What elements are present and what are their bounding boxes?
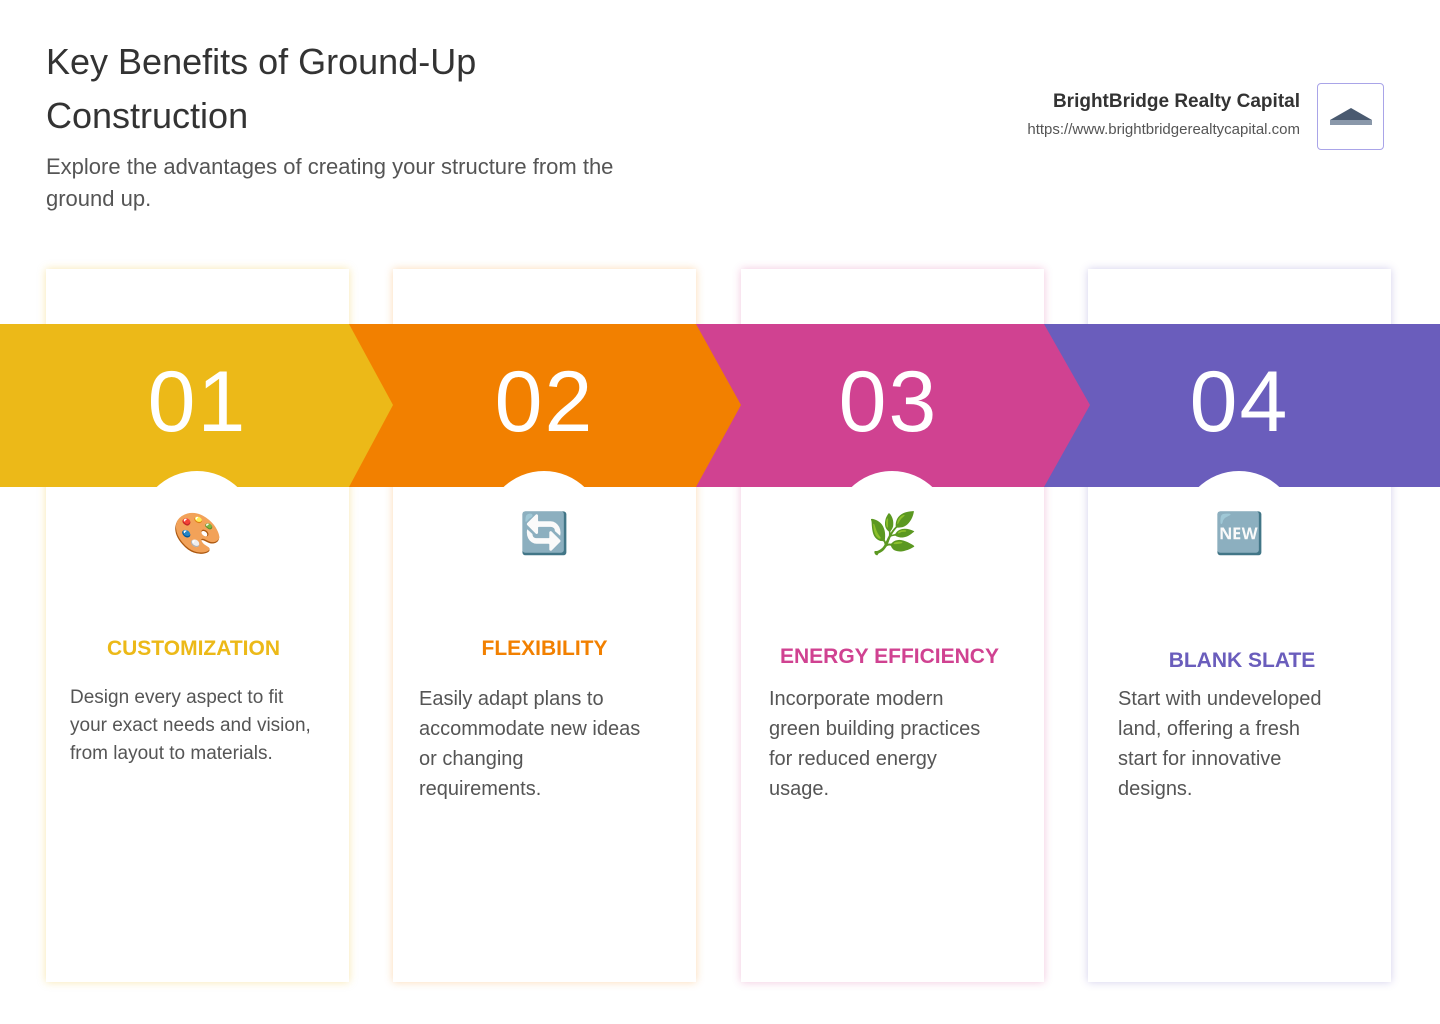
text 3: Incorporate modern [769, 688, 944, 710]
title: Construction [46, 95, 248, 136]
card 4 [1088, 269, 1391, 982]
card 3 [741, 269, 1044, 982]
number 03: 03 [839, 354, 938, 450]
heading 3: ENERGY EFFICIENCY [780, 645, 999, 668]
title [46, 41, 476, 136]
text 1: Design every aspect to fit [70, 687, 283, 708]
subtitle: Explore the advantages of creating your structure from the ground up. [46, 154, 613, 211]
text 2: accommodate new ideas [419, 718, 640, 740]
text 1: your exact needs and vision, [70, 715, 311, 736]
text 4: Start with undeveloped [1118, 688, 1321, 710]
heading 2: FLEXIBILITY [482, 637, 608, 660]
brand name: BrightBridge Realty Capital [1053, 91, 1300, 112]
chevron band [0, 324, 1440, 487]
icon: herb: 🌿 [868, 511, 917, 557]
icon: refresh: 🔄 [520, 511, 569, 557]
text 2: Easily adapt plans to [419, 688, 604, 710]
brand url: https://www.brightbridgerealtycapital.com [1027, 121, 1300, 138]
text 1: from layout to materials. [70, 743, 273, 764]
title: Key Benefits of Ground-Up [46, 41, 476, 82]
logo [1317, 83, 1384, 150]
icon: palette: 🎨 [173, 511, 222, 557]
number 02: 02 [495, 354, 594, 450]
text 2: or changing [419, 748, 524, 770]
text 3: green building practices [769, 718, 980, 740]
number 01: 01 [148, 354, 247, 450]
icon: new: 🆕 [1215, 511, 1264, 557]
card 2 [393, 269, 696, 982]
text 4: land, offering a fresh [1118, 718, 1300, 740]
card 1 [46, 269, 349, 982]
text 4 [1118, 688, 1321, 800]
semicircles [138, 471, 256, 589]
text 3: for reduced energy [769, 748, 937, 770]
text 2 [419, 688, 640, 800]
text 1 [70, 687, 311, 764]
text 4: start for innovative [1118, 748, 1281, 770]
text 2: requirements. [419, 778, 541, 800]
heading 4: BLANK SLATE [1169, 649, 1315, 672]
text 3: usage. [769, 778, 829, 800]
text 4: designs. [1118, 778, 1192, 800]
text 3 [769, 688, 980, 800]
number 04: 04 [1190, 354, 1289, 450]
heading 1: CUSTOMIZATION [107, 637, 280, 660]
brand block [1027, 83, 1384, 150]
